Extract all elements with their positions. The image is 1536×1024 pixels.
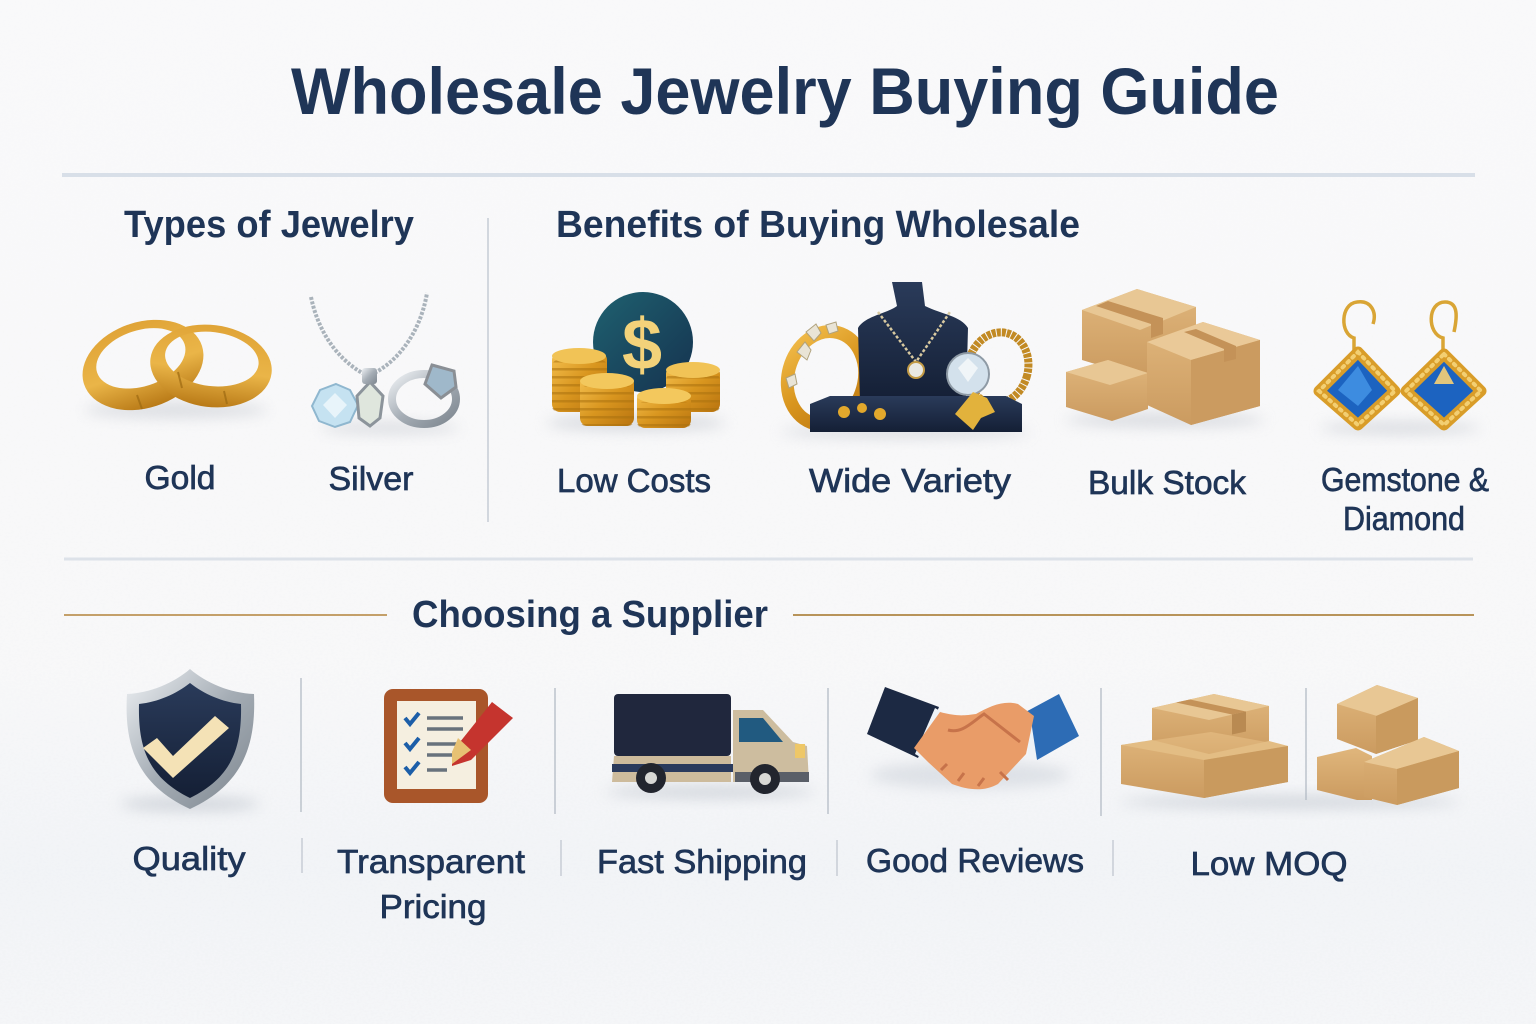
icon: coins with dollar [546,292,726,431]
label: gold: Gold [144,459,216,496]
title: Wholesale Jewelry Buying Guide [291,54,1279,128]
label: bulk stock: Bulk Stock [1088,464,1246,501]
section: choosing a supplier: Pricing [380,888,486,925]
label: transparent pricing: Transparent [337,843,525,880]
label: good reviews: Good Reviews [866,842,1084,879]
label: wide variety: Wide Variety [809,462,1012,499]
label: low costs: Low Costs [557,462,711,499]
label: fast shipping: Fast Shipping [597,843,807,880]
label: low moq: Low MOQ [1190,845,1348,882]
icon: gold rings [71,305,277,425]
heading: types of jewelry: Types of Jewelry [124,204,414,246]
icon: shield with check [120,669,260,811]
icon: checklist clipboard [384,689,513,803]
icon: gemstone earrings [1319,302,1481,434]
icon: delivery truck [605,694,815,798]
heading: benefits: Benefits of Buying Wholesale [556,204,1080,246]
icon: coins with dollar: $ [622,305,662,385]
section: benefits of buying wholesale [546,204,1489,537]
label: gemstone and diamond: Gemstone & [1321,461,1489,498]
heading: choosing a supplier: Choosing a Supplier [412,594,768,636]
section: types of jewelry [71,204,460,497]
label: silver: Silver [328,460,414,497]
icon: silver necklace and ring [311,293,460,434]
icon: bulk stock boxes [1065,289,1265,427]
icon: jewelry display [777,282,1036,438]
section: choosing a supplier [64,594,1474,925]
label: quality: Quality [132,840,246,877]
section: benefits of buying wholesale: Diamond [1343,500,1465,537]
icon: handshake [867,687,1079,789]
icon: low moq boxes [1120,685,1460,808]
